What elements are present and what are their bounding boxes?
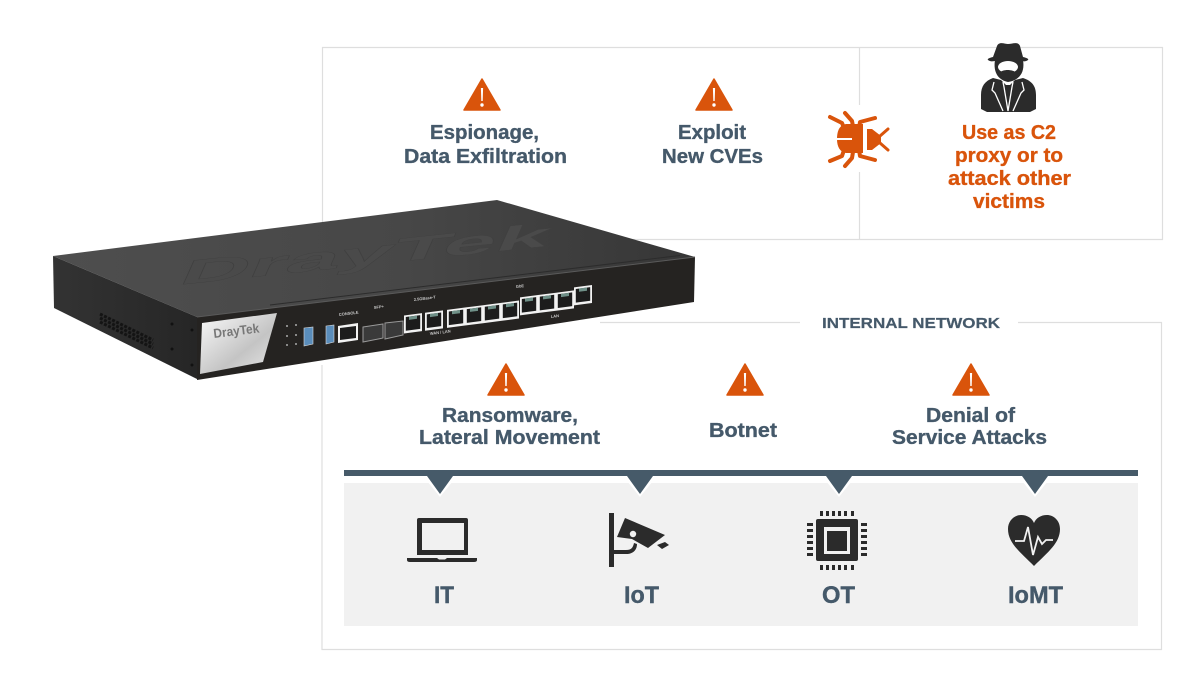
text: C2 proxy: victims	[973, 191, 1045, 213]
plate logo: DrayTek	[213, 320, 261, 341]
icon: chip	[807, 511, 867, 570]
icon: laptop	[407, 518, 477, 562]
text: botnet: Botnet	[709, 420, 777, 442]
port labels: GbE	[516, 283, 525, 289]
text: espionage: Data Exfiltration	[404, 146, 567, 168]
text: ransomware: Lateral Movement	[419, 427, 600, 449]
icon: warning ransomware	[488, 364, 524, 395]
icon: heart	[1008, 515, 1060, 566]
USB ports	[304, 327, 313, 346]
text: denial of service: Service Attacks	[892, 427, 1047, 449]
embossed logo: DrayTek	[174, 215, 559, 293]
icon: bug	[830, 113, 888, 166]
router side face	[53, 256, 197, 379]
text: exploit: Exploit	[678, 122, 746, 144]
console port	[338, 323, 358, 343]
text: C2 proxy: Use as C2	[962, 122, 1056, 144]
router top face	[53, 200, 695, 317]
port labels: SFP+	[374, 304, 385, 310]
text: espionage: Espionage,	[430, 122, 539, 144]
text: C2 proxy	[948, 122, 1071, 213]
text: exploit: New CVEs	[662, 146, 763, 168]
icon: warning espionage	[464, 79, 500, 110]
icon: warning botnet	[727, 364, 763, 395]
text: denial of service: Denial of	[926, 405, 1015, 427]
panel: internal network	[322, 322, 1162, 650]
port labels: 2.5GBase-T	[414, 294, 437, 302]
port labels: LAN	[551, 313, 559, 319]
text: ransomware: Ransomware,	[442, 405, 578, 427]
ethernet ports	[404, 285, 592, 333]
router front face	[197, 257, 695, 380]
icon: warning exploit	[696, 79, 732, 110]
text: denial of service	[892, 405, 1047, 449]
port labels: CONSOLE	[339, 310, 359, 317]
heading: internal network: INTERNAL NETWORK	[822, 315, 1000, 332]
silver plate	[200, 313, 277, 374]
label: OT: OT	[822, 582, 855, 609]
text: espionage	[404, 122, 567, 168]
label: IoMT: IoMT	[1008, 582, 1063, 609]
label: IoT: IoT	[624, 582, 659, 609]
text: ransomware	[419, 405, 600, 449]
text: C2 proxy: attack other	[948, 168, 1071, 190]
label: IT: IT	[434, 582, 454, 609]
panel: external threats	[322, 48, 1162, 240]
corner screws	[170, 322, 194, 366]
status LEDs	[286, 324, 297, 346]
side vents	[100, 314, 153, 348]
icon: camera	[609, 513, 669, 567]
icon: warning DoS	[953, 364, 989, 395]
SFP ports	[363, 324, 383, 342]
icon: hacker	[981, 43, 1036, 112]
text: C2 proxy: proxy or to	[955, 145, 1063, 167]
panel: device categories	[344, 483, 1138, 626]
port labels	[339, 283, 559, 336]
text: exploit	[662, 122, 763, 168]
router device	[53, 200, 695, 380]
port labels: WAN / LAN	[430, 328, 451, 336]
connector bar with pointers	[344, 470, 1138, 497]
